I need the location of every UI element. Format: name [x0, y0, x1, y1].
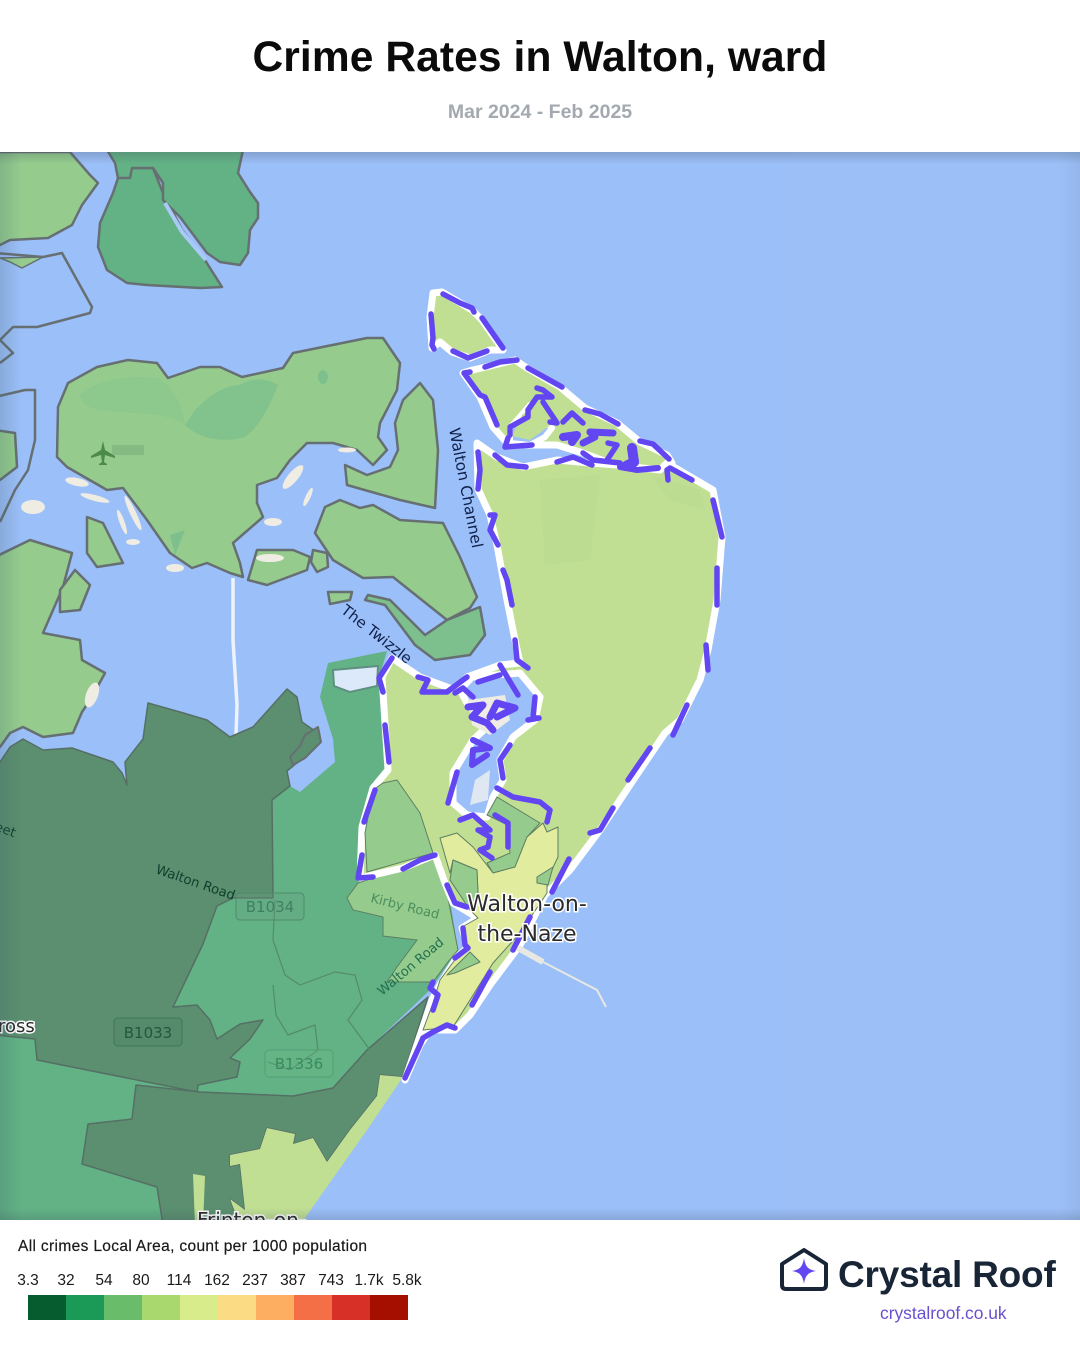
wordmark: Crystal Roof: [838, 1254, 1056, 1295]
legend tick labels: 32: [57, 1272, 75, 1289]
marina: [333, 666, 378, 692]
main northern marsh island: [57, 338, 400, 577]
label: Walton Channel: Walton Channel: [445, 426, 486, 550]
area: lowest-crime mainland: [0, 689, 320, 1092]
road shield: B1034: [236, 893, 304, 920]
pier: [518, 948, 606, 1007]
road shield: B1336: B1336: [275, 1055, 323, 1073]
ward: interior channels: [453, 402, 552, 817]
map edge shading: [0, 152, 1080, 1220]
icon: house with star: [780, 1248, 828, 1291]
legend tick labels: 237: [242, 1272, 268, 1289]
ward boundary dashes: [358, 294, 722, 1078]
website link: crystalroof.co.uk: [880, 1303, 1007, 1323]
label: Walton-on-the-Naze: the-Naze: [477, 922, 577, 947]
ward: Walton coastal land: [360, 292, 722, 1080]
causeway road: [233, 578, 237, 735]
label: Walton Road west: Walton Road: [154, 863, 237, 904]
subtitle: date range: Mar 2024 - Feb 2025: [448, 101, 632, 123]
icon: airport: [91, 441, 144, 465]
logo: Crystal Roof: [780, 1248, 1056, 1323]
legend tick labels: 1.7k: [354, 1272, 384, 1289]
legend title: All crimes Local Area, count per 1000 population: [18, 1238, 367, 1255]
water background: [0, 152, 1080, 1220]
legend tick labels: 743: [318, 1272, 344, 1289]
area: Kirby Road: [347, 857, 458, 982]
label: Walton-on-the-Naze: Walton-on-: [467, 892, 587, 917]
legend tick labels: 80: [132, 1272, 150, 1289]
label: Kirby Road: Kirby Road: [369, 891, 441, 923]
legend tick labels: 54: [95, 1272, 113, 1289]
legend tick labels: 3.3: [17, 1272, 39, 1289]
sandbanks: [21, 448, 356, 766]
ward: field tints: [540, 475, 705, 565]
road shield: B1336: [265, 1050, 333, 1077]
legend tick labels: 162: [204, 1272, 230, 1289]
area: mid-crime mainland: [0, 651, 458, 1225]
ward: interior neighbourhoods: [365, 780, 558, 1030]
road shield: B1034: B1034: [246, 898, 294, 916]
area: Frinton coast: [193, 1075, 403, 1225]
label: Walton-on-the-Naze: [467, 892, 587, 947]
label: Walton Road east: Walton Road: [375, 935, 447, 999]
northern islands: [0, 150, 258, 522]
legend colour scale: [28, 1295, 408, 1320]
small marsh islands: [0, 383, 485, 747]
legend tick labels: 387: [280, 1272, 306, 1289]
creek islet: [290, 727, 321, 765]
road shield: B1033: [114, 1018, 182, 1046]
channel between northern islands: [165, 203, 206, 260]
label: The Twizzle: The Twizzle: [337, 600, 416, 667]
area: southern low-crime: [82, 997, 428, 1225]
legend tick labels: 114: [167, 1272, 191, 1289]
estate boundaries: [268, 900, 370, 1070]
title: Crime Rates in Walton, ward: [252, 34, 827, 81]
map labels: [0, 426, 587, 1232]
legend: [17, 1238, 422, 1320]
legend tick labels: [17, 1272, 422, 1289]
road shield: B1033: B1033: [124, 1024, 172, 1042]
legend tick labels: 5.8k: [392, 1272, 422, 1289]
map: [0, 152, 1080, 1220]
